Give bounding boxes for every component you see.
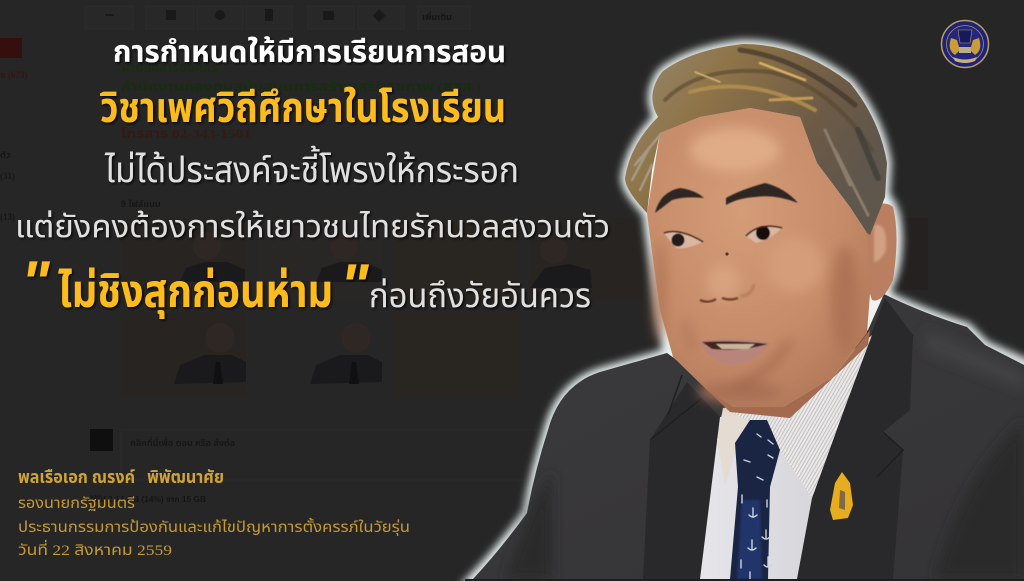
name: พลเรือเอก ณรงค์ พิพัฒนาศัย [18, 467, 224, 487]
jacket soft shadows [505, 330, 1024, 579]
tie [730, 420, 780, 579]
email signature: สำนักงานกองทุนสนับสนุนการสร้างเสริมสุขภาพ (สสส.) [121, 79, 481, 94]
toolbar [85, 6, 470, 29]
face [647, 108, 871, 407]
gold lapel pin [830, 472, 853, 520]
eyebrows [655, 183, 798, 213]
hair [625, 44, 887, 235]
toolbar label: เพิ่มเติม [422, 11, 452, 22]
committee: ประธานกรรมการป้องกันและแก้ไขปัญหาการตั้งครรภ์ในวัยรุ่น [18, 517, 410, 536]
reply box: คลิกที่นี่เพื่อ ตอบ หรือ ส่งต่อ [130, 436, 235, 448]
collar [723, 337, 871, 498]
hair strands [632, 50, 878, 215]
attribution [18, 467, 410, 559]
faded email screenshot [0, 6, 928, 504]
email signature: โทรสาร 02-343-1501 [121, 126, 251, 141]
quoted phrase: ไม่ชิงสุกก่อนห่าม [58, 266, 333, 319]
email signature [121, 58, 481, 141]
line 4: แต่ยังคงต้องการให้เยาวชนไทยรักนวลสงวนตัว [15, 209, 610, 244]
toolbar icons [105, 9, 385, 22]
white glow around portrait [470, 44, 1024, 581]
email signature: ฝ่ายสื่อสารองค์กร [121, 58, 218, 75]
shirt [700, 335, 872, 579]
icon: government seal [942, 20, 988, 68]
cheek shading [654, 237, 859, 402]
position: รองนายกรัฐมนตรี [18, 495, 135, 512]
neck shadow [705, 330, 870, 418]
reply box: ใช้ไป 2.14 GB (14%) จาก 15 GB [90, 494, 206, 504]
attachment thumbnails row 2 [121, 313, 519, 395]
portrait photo [465, 44, 1024, 581]
attachment thumbnails row 1 [122, 218, 928, 301]
attachments label: 9 ไฟล์แนบ [121, 199, 161, 209]
closing quote: " [340, 252, 370, 319]
eyes [664, 226, 782, 248]
sidebar labels: ย (673) [0, 70, 27, 80]
lapel edges [650, 375, 903, 477]
reply box [90, 429, 681, 504]
forehead highlight [690, 128, 780, 172]
sidebar labels [0, 70, 27, 222]
ear [862, 203, 896, 301]
main heading [15, 36, 610, 319]
sidebar labels: (31) [0, 171, 15, 181]
mouth [700, 339, 770, 365]
nose [700, 252, 754, 302]
line 2 highlighted: วิชาเพศวิถีศึกษาในโรงเรียน [100, 85, 506, 132]
date: วันที่ 22 สิงหาคม 2559 [18, 539, 172, 559]
sidebar labels: (13) [0, 212, 15, 222]
jacket [473, 294, 1024, 579]
line 1: การกำหนดให้มีการเรียนการสอน [113, 36, 506, 69]
jacket lapels [643, 298, 913, 579]
sidebar labels: ตัว [0, 150, 11, 160]
bottom edge of photo [465, 579, 1024, 581]
line 5 tail: ก่อนถึงวัยอันควร [369, 277, 591, 315]
line 3: ไม่ได้ประสงค์จะชี้โพรงให้กระรอก [104, 145, 519, 190]
anchor pattern [741, 434, 773, 579]
opening quote: " [21, 249, 51, 316]
sidebar red button [0, 38, 22, 58]
